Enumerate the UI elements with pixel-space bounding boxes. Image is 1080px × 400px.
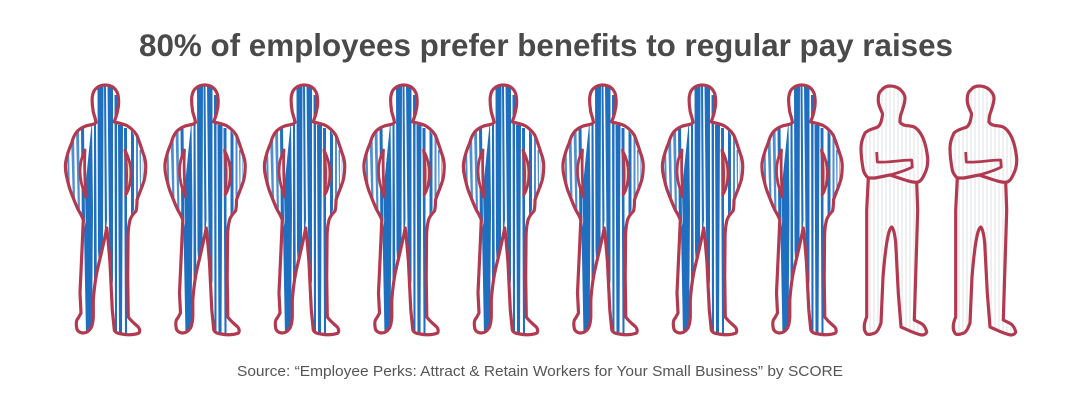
person icon 5: filled blue bbox=[463, 85, 544, 335]
person icon 1: filled blue bbox=[65, 85, 146, 335]
person icon 8: filled blue bbox=[762, 85, 842, 335]
source note: Source: “Employee Perks: Attract & Retain Workers for Your Small Business” by SCORE bbox=[237, 363, 843, 380]
person icon 2: filled blue bbox=[165, 85, 245, 335]
person icon 3: filled blue bbox=[264, 85, 345, 335]
person icon 6: filled blue bbox=[563, 85, 643, 335]
person icon 7: filled blue bbox=[662, 85, 743, 335]
person icon 9: unfilled with crossed arms bbox=[861, 85, 928, 335]
title: 80% of employees prefer benefits to regular pay raises bbox=[139, 27, 953, 63]
person icon 10: unfilled with crossed arms bbox=[950, 85, 1017, 335]
person icon 4: filled blue bbox=[364, 85, 444, 335]
